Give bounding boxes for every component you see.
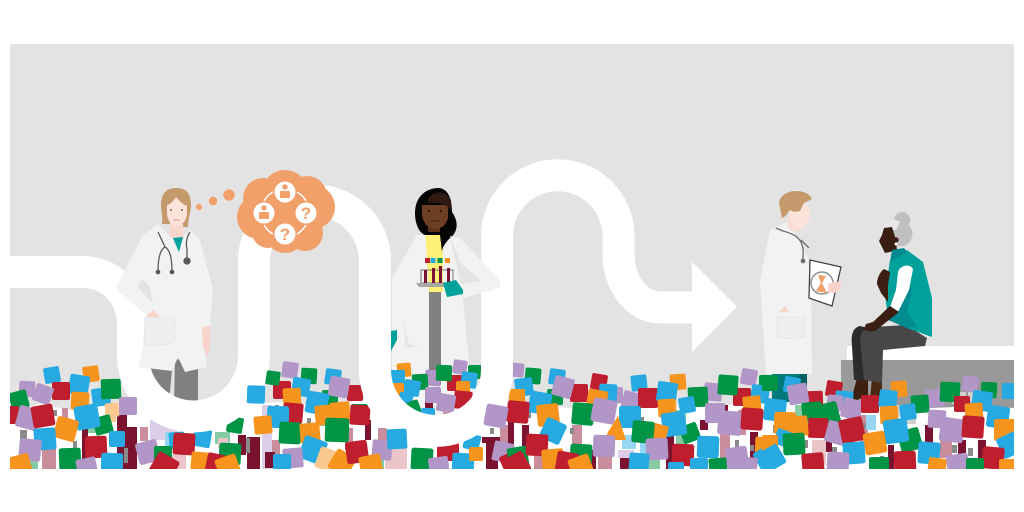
- doctor three hand: [828, 282, 841, 293]
- doctor one coat: [117, 224, 213, 372]
- white journey path with arrow: [10, 175, 737, 431]
- icon: question right: ?: [301, 204, 311, 223]
- doctor three coat: [760, 222, 812, 374]
- doctor three: [760, 191, 841, 374]
- arcs between icons: [264, 192, 306, 234]
- doctor one: [117, 188, 213, 372]
- patient back leg: [852, 326, 875, 380]
- icon: person left: [254, 202, 274, 224]
- doctor one stethoscope: [156, 232, 190, 274]
- doctor two lower body: [391, 188, 472, 392]
- doctor three lower body and patient shoes: [772, 370, 882, 404]
- patient trousers: [860, 325, 927, 383]
- doctor one head: [161, 188, 191, 252]
- thought dots: [196, 189, 235, 210]
- icon: person top: [274, 182, 296, 202]
- doctor two sample tray: [416, 258, 453, 287]
- patient: [852, 212, 932, 383]
- clipboard: [809, 260, 841, 306]
- specimen tube pile: [10, 359, 1014, 469]
- thought bubble: [237, 170, 335, 253]
- doctor one hand: [145, 310, 160, 317]
- doctor three head: [779, 191, 812, 232]
- icon: question bottom: ?: [280, 225, 290, 244]
- doctor one legs: [150, 358, 198, 404]
- examination bench: [841, 346, 1014, 410]
- doctor one arm gap: [137, 279, 153, 304]
- patient sleeve: [890, 265, 913, 312]
- patient arm: [864, 306, 899, 331]
- barcodes: [20, 405, 973, 463]
- doctor two head: [415, 188, 457, 252]
- patient head: [879, 212, 912, 262]
- tube caps, back rows: [10, 359, 1014, 469]
- patient vest: [885, 250, 932, 337]
- tube bodies: [10, 385, 1014, 469]
- patient chest hand: [877, 269, 890, 302]
- tube caps in front of the path: [119, 370, 509, 450]
- doctor three stethoscope: [776, 228, 809, 263]
- doctor two raised arm: [443, 236, 500, 298]
